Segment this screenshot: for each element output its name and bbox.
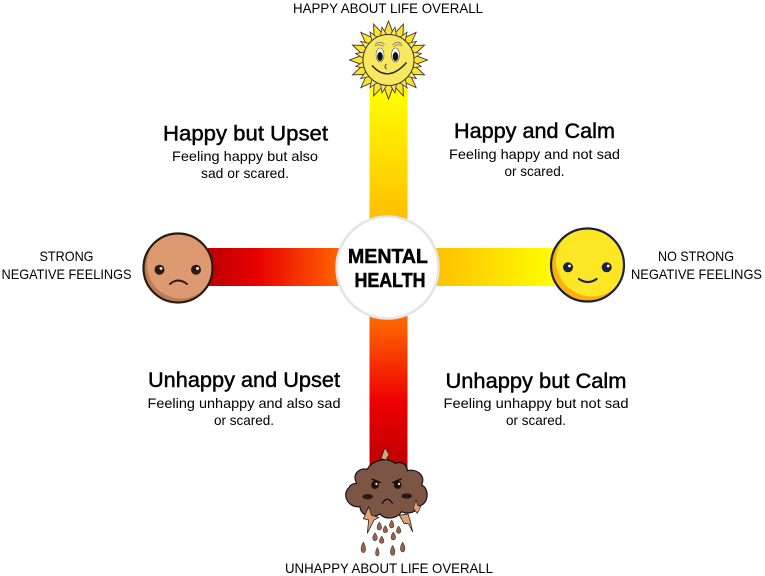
text block: unhappy but calm: Feeling unhappy but not sad xyxy=(444,395,628,411)
text block: happy and calm: Happy and Calm xyxy=(454,120,615,143)
text block: happy and calm: or scared. xyxy=(504,163,564,179)
horizontal gradient bar xyxy=(208,248,555,286)
icon: sad face xyxy=(144,230,215,302)
text block: unhappy but calm: Unhappy but Calm xyxy=(446,370,626,393)
text block: unhappy and upset xyxy=(148,369,340,428)
label: happy about life overall: HAPPY ABOUT LIFE OVERALL xyxy=(293,0,483,16)
central mental health circle xyxy=(336,216,438,318)
text block: unhappy but calm: or scared. xyxy=(506,412,566,428)
text block: unhappy but calm xyxy=(444,370,628,428)
text block: happy and calm: Feeling happy and not sad xyxy=(449,146,620,162)
icon: storm cloud xyxy=(346,447,427,556)
vertical gradient bar xyxy=(370,88,408,470)
label: unhappy about life overall: UNHAPPY ABOUT LIFE OVERALL xyxy=(285,560,493,576)
text block: happy but upset: Feeling happy but also xyxy=(172,148,318,164)
central mental health circle: HEALTH xyxy=(354,270,426,292)
text block: happy but upset: Happy but Upset xyxy=(163,122,328,146)
text block: unhappy and upset: Unhappy and Upset xyxy=(148,369,340,392)
label: strong negative feelings: NEGATIVE FEELINGS xyxy=(2,266,132,282)
label: strong negative feelings xyxy=(2,248,132,282)
text block: unhappy and upset: or scared. xyxy=(214,412,274,428)
central mental health circle: MENTAL xyxy=(348,246,428,268)
icon: smiling face xyxy=(551,224,628,302)
text block: happy but upset xyxy=(163,122,328,181)
text block: happy and calm xyxy=(449,120,620,179)
label: strong negative feelings: STRONG xyxy=(40,248,94,264)
text block: happy but upset: sad or scared. xyxy=(201,165,289,181)
text block: unhappy and upset: Feeling unhappy and also sad xyxy=(148,395,340,411)
label: no strong negative feelings xyxy=(631,248,762,282)
label: no strong negative feelings: NO STRONG xyxy=(658,248,734,264)
icon: smiling sun xyxy=(349,21,428,99)
